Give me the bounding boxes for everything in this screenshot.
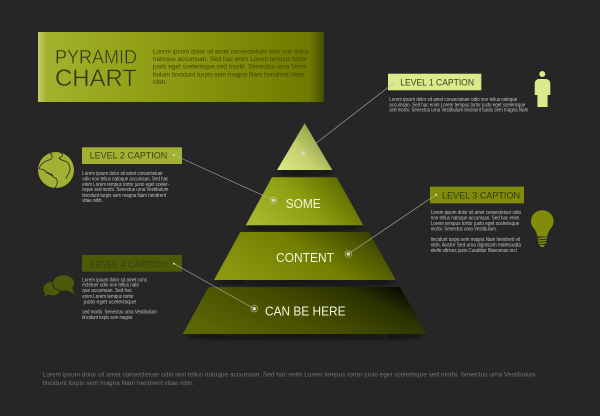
tier 4: can be here <box>183 287 427 338</box>
level 2 label <box>82 147 182 164</box>
icon: globe <box>38 152 74 189</box>
footer text: Lorem ipsum dolor sit amet consectetuer odio non tellus natoque accumsan. Sed hac enim Lorem tempus tortor justo eget scelerisque sed morbi. Senectus urna Vestibulum <box>43 372 536 379</box>
title: pyramid chart: PYRAMID <box>55 46 137 68</box>
footer text: tincidunt turpis sem magna Nam hendrerit vitae nibh. <box>43 380 194 387</box>
banner background <box>38 32 324 102</box>
level 1 text: accumsan. Sed hac enim Lorem tempus tortor justo eget scelerisque <box>389 102 525 108</box>
level 2 text: Lorem ipsum dolor sit amet consectetuer <box>82 171 163 177</box>
title: pyramid chart: CHART <box>55 65 137 92</box>
level 1 label: LEVEL 1 CAPTION <box>400 77 474 88</box>
icon: light bulb <box>531 210 554 247</box>
title banner <box>38 32 324 102</box>
pyramid chart <box>183 123 427 338</box>
level 3 caption <box>430 187 554 254</box>
level 4 text: que accumsan. Sed hac <box>82 288 132 294</box>
level 3 label: LEVEL 3 CAPTION <box>442 190 520 201</box>
connector level 3 <box>345 194 437 257</box>
level 2 text <box>82 171 169 204</box>
level 4 label: LEVEL 4 CAPTION <box>91 258 167 269</box>
banner description: nibh. <box>153 79 167 86</box>
level 4 text: ectetuer odio non tellus nato <box>82 282 139 288</box>
connector level 1 <box>300 81 396 156</box>
level 2 text: odio non tellus natoque accumsan. Sed hac <box>82 176 169 182</box>
callout connectors <box>173 81 437 312</box>
level 2 text: enim Lorem tempus tortor justo eget sceler- <box>82 182 169 188</box>
level 2 caption <box>38 147 182 204</box>
level 4 text: Lorem ipsum dolor sit amet cons <box>82 277 147 283</box>
level 4 text <box>82 277 157 321</box>
level 3 text <box>431 210 521 254</box>
banner description: justo eget scelerisque sed morbi. Senectus urna Vesti- <box>152 64 307 71</box>
banner description: Lorem ipsum dolor sit amet consectetuer odio non tellus <box>153 48 309 55</box>
level 2 text: tincidunt turpis sem magna Nam hendrerit <box>82 193 167 199</box>
level 3 text: morbi. Senectus urna Vestibulum . <box>431 226 498 232</box>
level 1 label <box>388 74 481 90</box>
banner description: bulum tincidunt turpis sem magna Nam hendrerit vitae <box>153 71 305 78</box>
level 1 caption <box>388 71 550 114</box>
icon: speech bubbles <box>44 275 74 296</box>
level 4 text: tincidunt turpis sem magna <box>82 315 132 321</box>
footer text <box>43 372 536 387</box>
level 2 text: isque sed morbi. Senectus urna Vestibulum <box>82 187 168 193</box>
level 1 text <box>389 97 528 114</box>
level 3 text: nibh. Auctor Sed urna dignissim malesuada <box>431 242 521 248</box>
level 3 text: tincidunt turpis sem magna Nam hendrerit vit <box>431 237 521 243</box>
level 1 text: sed morbi. Senectus urna Vestibulum tincidunt turpis sem magna Nam <box>389 108 528 114</box>
level 1 text: Lorem ipsum dolor sit amet consectetuer odio non tellus natoque <box>389 97 517 103</box>
banner description <box>152 48 309 86</box>
tier 3: content: CONTENT <box>276 251 334 265</box>
icon: person <box>535 71 550 107</box>
level 4 text: enim Lorem tempus tortor <box>82 294 134 300</box>
tier 3: content <box>214 232 396 284</box>
tier 1 <box>277 123 332 174</box>
connector level 4 <box>173 263 258 312</box>
level 2 text: vitae nibh. <box>82 198 103 204</box>
level 4 caption <box>44 255 182 321</box>
banner description: natoque accumsan. Sed hac enim Lorem tempus tortor <box>153 56 307 63</box>
level 2 label: LEVEL 2 CAPTION <box>90 150 167 161</box>
level 4 text: justo eget scelerisque <box>82 300 136 306</box>
connector level 2 <box>173 154 277 204</box>
level 3 text: Lorem tempus tortor justo eget scelerisque <box>431 221 519 227</box>
tier 2: some <box>246 177 363 230</box>
tier 4: can be here: CAN BE HERE <box>265 304 346 318</box>
level 3 text: eleife ultrices justo Curabitur Maecenas orci <box>431 248 517 254</box>
level 3 text: Lorem ipsum dolor sit amet consectetuer odio <box>431 210 521 216</box>
title: pyramid chart <box>55 46 137 92</box>
tier 2: some: SOME <box>286 197 321 211</box>
level 3 text: non tellus natoque accumsan. Sed hac enim <box>431 216 519 222</box>
level 4 text: sed morbi. Senectus urna Vestibulum <box>82 310 157 316</box>
